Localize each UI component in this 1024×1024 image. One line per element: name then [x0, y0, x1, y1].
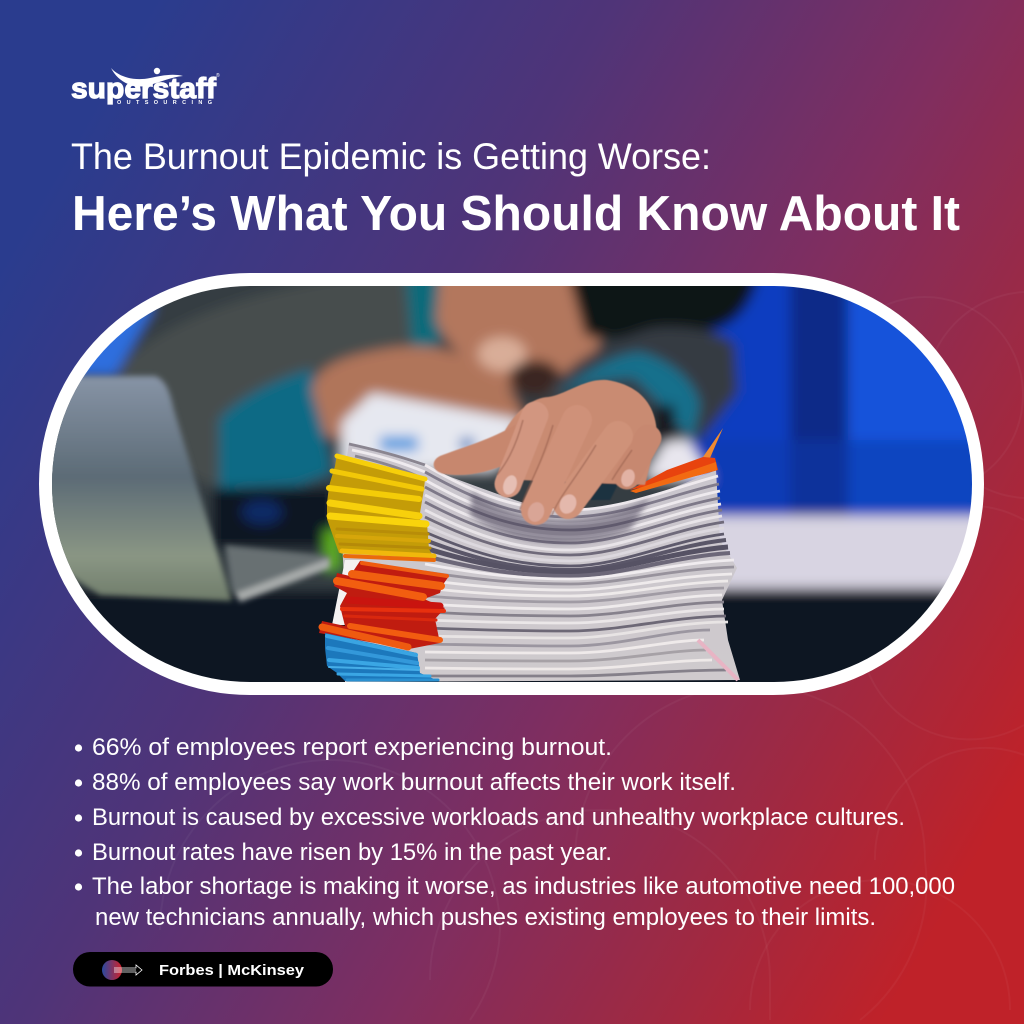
bullet 4: Burnout rates have risen by 15% in the past year. [92, 839, 612, 866]
logo subtitle: OUTSOURCING [117, 100, 212, 106]
stack sheet lines [349, 444, 738, 680]
fingernails [502, 474, 518, 496]
photo panel: pill-shaped photo of stressed worker with paper stack [30, 270, 990, 700]
source text: Forbes | McKinsey [159, 962, 305, 979]
orange and red tabs [319, 556, 449, 649]
logo wordmark: superstaff [71, 73, 216, 105]
white sheet edge behind red tabs [332, 560, 360, 625]
stack body [340, 443, 740, 682]
pill white frame [39, 273, 984, 695]
source badge [73, 952, 333, 986]
sleeve [219, 369, 332, 488]
middle finger [520, 480, 566, 526]
logo registered mark: ® [216, 72, 220, 79]
title line 2: Here’s What You Should Know About It [72, 187, 960, 241]
logo: superstaff outsourcing [71, 68, 220, 106]
paper stack [319, 443, 740, 682]
bullet 1: 66% of employees report experiencing burnout. [92, 734, 612, 761]
ring finger [568, 436, 618, 504]
blue tabs [325, 633, 439, 681]
bullet 5: new technicians annually, which pushes existing employees to their limits. [95, 904, 876, 931]
bullet list [75, 734, 955, 931]
yellow tabs [327, 454, 434, 558]
stack shadows [470, 492, 650, 543]
blurred documents [342, 393, 520, 470]
laptop [46, 376, 330, 602]
logo dot [154, 68, 160, 74]
orange flag on stack [630, 428, 723, 493]
bullet 2: 88% of employees say work burnout affects their work itself. [92, 769, 736, 796]
bullet 5 [75, 873, 955, 931]
bullet 3: Burnout is caused by excessive workloads and unhealthy workplace cultures. [92, 804, 905, 831]
wrist and back of hand [498, 380, 657, 485]
blurred left hand [312, 347, 524, 440]
icon: gradient ball with arrow [102, 960, 142, 980]
title line 1: The Burnout Epidemic is Getting Worse: [71, 136, 711, 177]
front hand [434, 380, 657, 524]
bullet 5: The labor shortage is making it worse, as industries like automotive need 100,000 [92, 873, 955, 900]
jacket [550, 327, 738, 442]
blurred office backdrop [52, 286, 972, 682]
thumb [433, 430, 506, 476]
dark gap between fingers [590, 483, 618, 500]
index finger [508, 415, 535, 484]
blurred face [436, 270, 605, 395]
cuff [553, 352, 700, 442]
logo swoosh [111, 68, 183, 86]
pinky [627, 438, 648, 476]
